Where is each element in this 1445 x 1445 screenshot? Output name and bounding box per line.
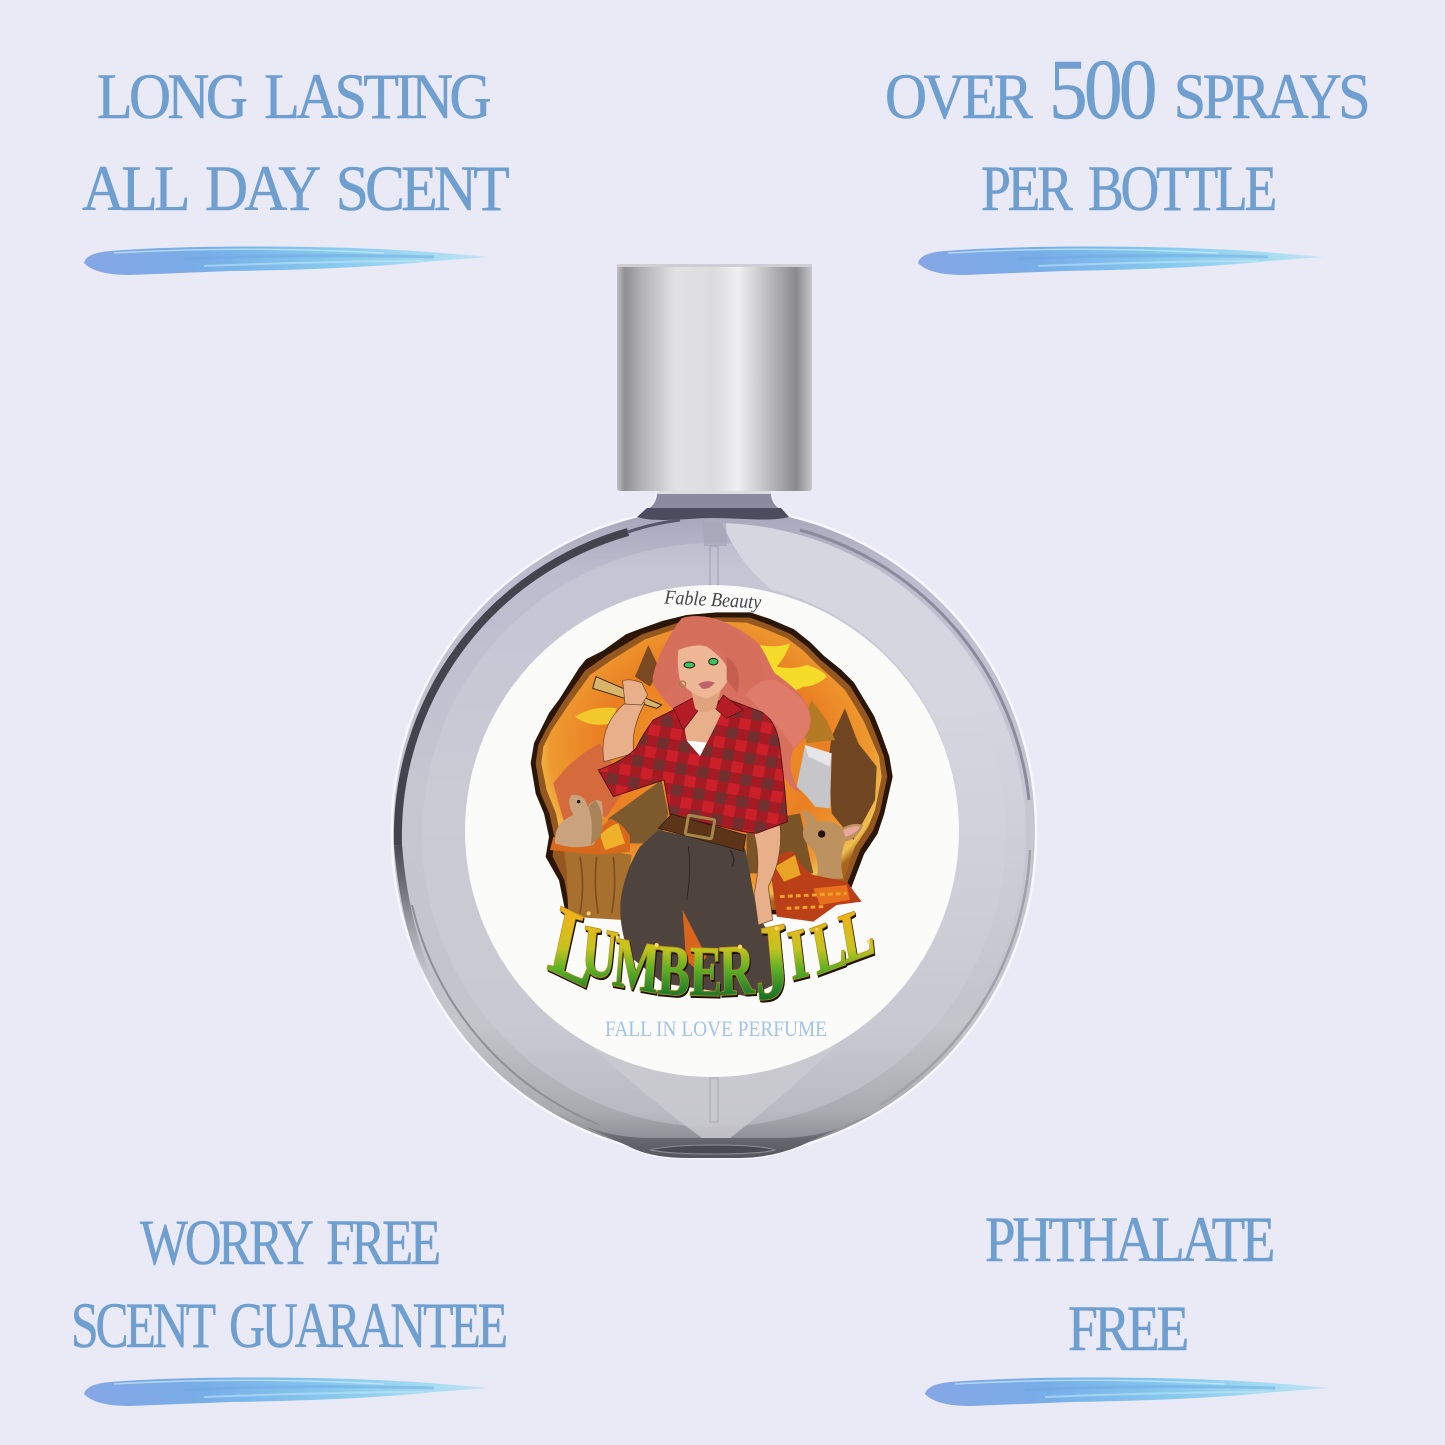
callout: phthalate free	[925, 1204, 1331, 1406]
shirt	[598, 700, 787, 833]
collar	[673, 697, 700, 730]
tree stump	[566, 850, 632, 920]
product label	[465, 585, 959, 1077]
axe blade	[797, 745, 832, 808]
leaves bush right	[770, 852, 862, 922]
title: lumber jill: L	[541, 885, 608, 1010]
lower V reflection	[590, 1042, 840, 1138]
callout: over 500 sprays per bottle	[885, 41, 1368, 275]
heading: all day scent: ALL DAY SCENT	[82, 153, 509, 225]
squirrel	[555, 795, 603, 847]
mountain left	[553, 743, 627, 820]
heading: free: FREE	[1068, 1293, 1187, 1365]
face	[678, 645, 730, 698]
wood slice	[532, 613, 892, 913]
silver cap	[617, 264, 812, 491]
label disc	[465, 585, 959, 1077]
hand on log	[623, 680, 648, 705]
lower left line	[412, 905, 600, 1125]
illustration: lumberjill	[532, 613, 892, 1024]
title: lumber jill: J	[748, 899, 795, 1024]
base ellipse	[650, 1145, 775, 1154]
heading: scent guarantee: SCENT GUARANTEE	[71, 1290, 506, 1362]
hair front	[653, 616, 764, 695]
sky highlights	[760, 643, 827, 691]
neck	[647, 493, 781, 510]
neck shoulders shadow	[637, 508, 789, 520]
brush stroke underline	[918, 247, 1324, 275]
lips	[698, 681, 715, 689]
title: lumber jill	[541, 885, 879, 1024]
right light reflection	[722, 523, 1026, 990]
spray tube	[703, 522, 727, 546]
neck	[691, 687, 722, 712]
heading: phthalate: PHTHALATE	[985, 1204, 1273, 1276]
left dark rim	[398, 532, 628, 845]
deer	[802, 810, 863, 880]
left forearm	[603, 703, 645, 762]
right arm	[754, 825, 781, 925]
leaves by stump	[550, 818, 630, 854]
earring	[680, 681, 686, 687]
callout: long lasting all day scent	[82, 61, 509, 275]
brush stroke underline	[925, 1378, 1331, 1406]
inner glass ring	[422, 543, 1006, 1127]
heading: worry free: WORRY FREE	[140, 1207, 439, 1279]
log on shoulder	[593, 677, 662, 708]
heading: over 500 sprays: OVER 500 SPRAYS	[885, 41, 1368, 137]
perfume bottle	[392, 264, 1036, 1158]
eyes	[684, 662, 695, 668]
belt	[658, 814, 746, 851]
brand: fable beauty: Fable Beauty	[663, 586, 762, 614]
title: lumber jill: ILL	[784, 890, 879, 996]
belt buckle	[685, 815, 715, 839]
base	[552, 1112, 876, 1158]
lower left rim	[398, 845, 430, 985]
callout: worry free scent guarantee	[71, 1207, 506, 1406]
heading: long lasting: LONG LASTING	[97, 61, 490, 133]
orange ground between legs	[683, 910, 707, 970]
tagline: fall in love perfume: FALL IN LOVE PERFUME	[605, 1016, 827, 1041]
pants	[620, 830, 783, 997]
forest behind torso	[605, 780, 668, 843]
title sparkles	[587, 911, 870, 949]
heading: per bottle: PER BOTTLE	[981, 153, 1275, 225]
brush stroke underline	[84, 1378, 490, 1406]
hair back	[653, 616, 811, 793]
tree left	[635, 645, 660, 687]
chest skin	[685, 702, 727, 755]
white tank top	[687, 741, 707, 756]
title: lumber jill: UMBER	[578, 910, 756, 1012]
forest right	[828, 708, 877, 840]
right rim	[800, 530, 1029, 800]
brush stroke underline	[84, 247, 490, 275]
glass body	[392, 491, 1036, 1158]
